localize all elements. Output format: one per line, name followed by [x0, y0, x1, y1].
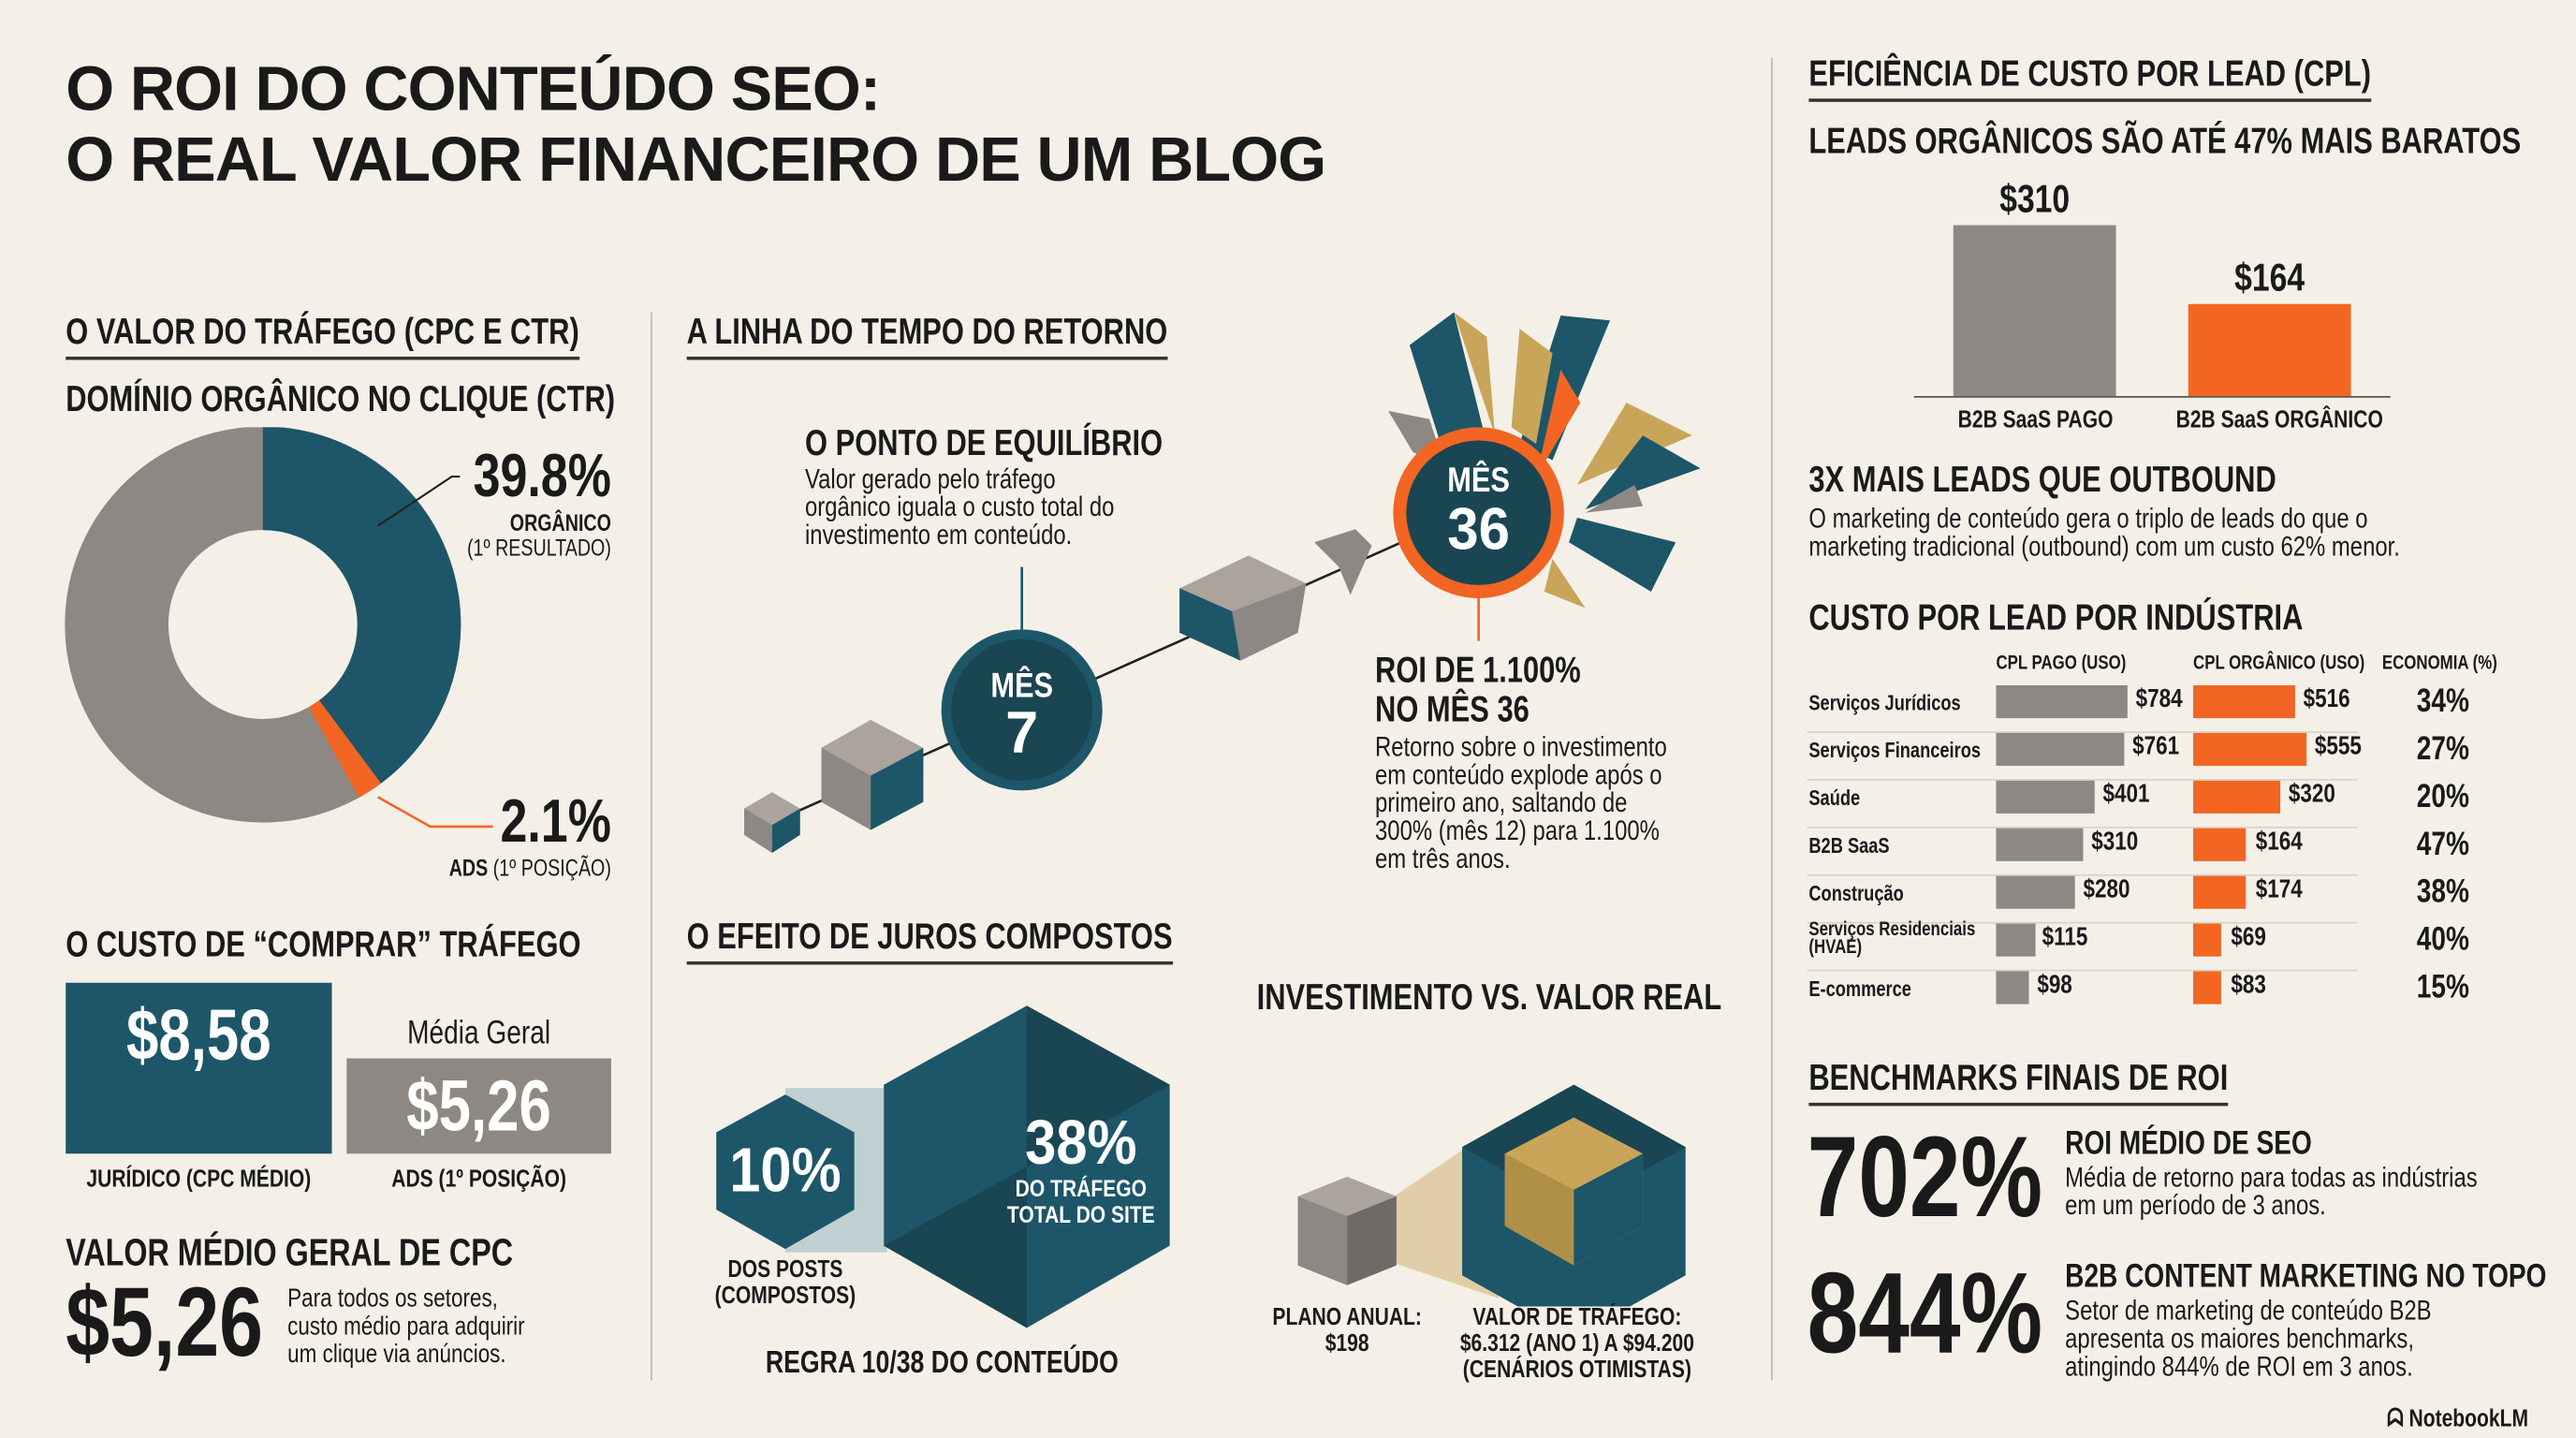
table: cpl industria: (HVAE) — [1808, 935, 1862, 958]
graphic: hexagons 10/38: TOTAL DO SITE — [1007, 1203, 1155, 1228]
table: cpl industria: B2B SaaS — [1808, 833, 1890, 858]
title — [66, 54, 1325, 196]
stat: 2.1%: ADS (1º POSIÇÃO) — [449, 855, 611, 881]
table: cpl industria: 34% — [2417, 683, 2469, 720]
text: cpc description: custo médio para adquirir — [287, 1313, 525, 1341]
graphic: hexagons 10/38: 10% — [729, 1137, 842, 1206]
heading: benchmarks: BENCHMARKS FINAIS DE ROI — [1808, 1057, 2228, 1098]
table: cpl industria: Construção — [1808, 881, 1904, 905]
heading: custo comprar trafego: O CUSTO DE “COMPRAR” TRÁFEGO — [66, 924, 581, 964]
timeline graphic — [744, 313, 1700, 853]
text: roi 1100: primeiro ano, saltando de — [1375, 787, 1627, 818]
text: cpc description — [287, 1285, 525, 1369]
text: cpc description: Para todos os setores, — [287, 1285, 498, 1313]
timeline graphic: 7 — [1005, 700, 1038, 766]
heading: 3x leads: 3X MAIS LEADS QUE OUTBOUND — [1808, 459, 2276, 500]
text: b2b content: Setor de marketing de conteúdo B2B — [2065, 1295, 2432, 1327]
table: cpl industria: Saúde — [1808, 785, 1860, 810]
heading: investimento vs valor: INVESTIMENTO VS. VALOR REAL — [1257, 976, 1721, 1018]
stat: 39.8%: ORGÂNICO — [510, 509, 611, 536]
stat: 39.8% — [467, 442, 611, 561]
chart: cpl bars: $164 — [2234, 257, 2305, 301]
table: cpl industria: CPL ORGÂNICO (USO) — [2193, 651, 2364, 674]
table: cpl industria: $115 — [2042, 924, 2087, 951]
graphic: investimento cubes — [1297, 1084, 1686, 1307]
graphic: hexagons 10/38: DO TRÁFEGO — [1016, 1176, 1147, 1202]
text: outbound: O marketing de conteúdo gera o triplo de leads do que o — [1808, 503, 2368, 535]
table: cpl industria: $401 — [2103, 781, 2150, 809]
stat: 2.1% — [449, 787, 611, 881]
bar: juridico — [66, 983, 332, 1153]
table: cpl industria: Serviços Financeiros — [1808, 738, 1981, 763]
label: valor trafego: VALOR DE TRÁFEGO: — [1472, 1303, 1681, 1331]
text: roi 1100: 300% (mês 12) para 1.100% — [1375, 815, 1660, 846]
table: cpl industria: $164 — [2256, 829, 2303, 857]
chart: cpl bars: B2B SaaS PAGO — [1958, 406, 2113, 433]
text: b2b content: B2B CONTENT MARKETING NO TOPO — [2065, 1259, 2546, 1295]
text: b2b content: atingindo 844% de ROI em 3 anos. — [2065, 1351, 2413, 1382]
caption: regra 10/38: REGRA 10/38 DO CONTEÚDO — [766, 1346, 1119, 1381]
table: cpl industria: ECONOMIA (%) — [2382, 651, 2497, 674]
table: cpl industria: $761 — [2132, 733, 2179, 761]
label: valor trafego: (CENÁRIOS OTIMISTAS) — [1463, 1356, 1691, 1384]
text: ponto de equilibrio: orgânico iguala o custo total do — [805, 492, 1114, 522]
graphic: hexagons 10/38: 38% — [1025, 1108, 1137, 1178]
table: cpl industria: $83 — [2231, 971, 2266, 999]
text: roi medio seo — [2065, 1124, 2478, 1221]
text: roi medio seo: Média de retorno para todas as indústrias — [2065, 1162, 2478, 1193]
title: O ROI DO CONTEÚDO SEO: — [66, 56, 880, 125]
table: cpl industria: $280 — [2083, 876, 2130, 903]
table: cpl industria: $310 — [2091, 829, 2138, 857]
subheading: 47%: LEADS ORGÂNICOS SÃO ATÉ 47% MAIS BARATOS — [1808, 120, 2521, 161]
table: cpl industria: $174 — [2256, 876, 2303, 903]
heading: cpl por industria: CUSTO POR LEAD POR INDÚSTRIA — [1808, 596, 2303, 638]
table: cpl industria: 40% — [2417, 922, 2469, 958]
bar: ads media: $5,26 — [406, 1066, 551, 1147]
stat: 39.8%: (1º RESULTADO) — [467, 535, 611, 561]
text: ponto de equilibrio: O PONTO DE EQUILÍBRIO — [805, 422, 1163, 463]
table: cpl industria: 27% — [2417, 731, 2469, 768]
text: roi medio seo: ROI MÉDIO DE SEO — [2065, 1125, 2312, 1162]
chart: cpl bars: B2B SaaS ORGÂNICO — [2176, 406, 2383, 433]
chart: cpl bars: $310 — [1999, 178, 2070, 222]
bar: juridico: $8,58 — [126, 996, 271, 1077]
label: valor trafego — [1460, 1303, 1694, 1384]
timeline graphic: MÊS — [1447, 460, 1510, 499]
footer: notebooklm: ᗣ NotebookLM — [2387, 1405, 2528, 1433]
label: plano anual: $198 — [1325, 1329, 1369, 1357]
timeline graphic: 36 — [1447, 496, 1510, 562]
title: O REAL VALOR FINANCEIRO DE UM BLOG — [66, 126, 1325, 196]
table: cpl industria: $555 — [2315, 733, 2362, 761]
table: cpl industria: 20% — [2417, 779, 2469, 815]
chart: cpl bars — [1913, 178, 2391, 433]
label: plano anual — [1272, 1303, 1422, 1357]
table: cpl industria: $516 — [2304, 685, 2350, 713]
table: cpl industria: CPL PAGO (USO) — [1996, 651, 2126, 674]
table: cpl industria: $784 — [2136, 685, 2183, 713]
stat: 844%: 844% — [1808, 1249, 2042, 1377]
text: roi medio seo: em um período de 3 anos. — [2065, 1190, 2326, 1221]
bar: ads media — [346, 1058, 611, 1153]
stat: $5,26: $5,26 — [66, 1267, 263, 1377]
text: Média Geral — [407, 1016, 550, 1051]
text: b2b content: apresenta os maiores benchmarks, — [2065, 1323, 2414, 1354]
table: cpl industria: Serviços Residenciais — [1808, 917, 1975, 940]
subheading: ctr: DOMÍNIO ORGÂNICO NO CLIQUE (CTR) — [66, 378, 615, 419]
stat: 702%: 702% — [1808, 1112, 2042, 1240]
table: cpl industria: E-commerce — [1808, 976, 1911, 1001]
text: roi 1100 — [1375, 649, 1667, 874]
text: ponto de equilibrio: investimento em conteúdo. — [805, 520, 1072, 550]
chart: donut — [65, 427, 493, 828]
stat: 2.1%: 2.1% — [500, 787, 611, 855]
label: dos posts: DOS POSTS — [727, 1255, 842, 1284]
label: plano anual: PLANO ANUAL: — [1272, 1303, 1422, 1331]
table: cpl industria: Serviços Jurídicos — [1808, 690, 1961, 715]
label: valor trafego: $6.312 (ANO 1) A $94.200 — [1460, 1329, 1694, 1357]
table: cpl industria: 38% — [2417, 874, 2469, 910]
text: roi 1100: NO MÊS 36 — [1375, 689, 1530, 729]
table: cpl industria: $320 — [2289, 781, 2335, 809]
table: cpl industria: $69 — [2231, 924, 2266, 951]
text: ponto de equilibrio: Valor gerado pelo tráfego — [805, 463, 1056, 494]
table: cpl industria: 47% — [2417, 827, 2469, 863]
heading: eficiencia cpl: EFICIÊNCIA DE CUSTO POR LEAD (CPL) — [1808, 52, 2371, 94]
timeline graphic: MÊS — [990, 665, 1053, 704]
table: cpl industria: $98 — [2037, 971, 2072, 999]
table: cpl industria — [1807, 651, 2497, 1005]
heading: juros compostos: O EFEITO DE JUROS COMPOSTOS — [687, 916, 1173, 957]
text: b2b content — [2065, 1259, 2546, 1382]
stat: 39.8%: 39.8% — [474, 442, 611, 509]
text: roi 1100: em conteúdo explode após o — [1375, 759, 1662, 790]
text: ADS (1º POSIÇÃO) — [391, 1166, 566, 1193]
text: roi 1100: Retorno sobre o investimento — [1375, 731, 1667, 763]
text: roi 1100: ROI DE 1.100% — [1375, 649, 1581, 690]
text: ponto de equilibrio — [805, 422, 1163, 550]
heading: valor medio cpc: VALOR MÉDIO GERAL DE CPC — [66, 1231, 513, 1273]
heading: linha do tempo: A LINHA DO TEMPO DO RETORNO — [687, 311, 1167, 352]
text: roi 1100: em três anos. — [1375, 844, 1511, 874]
label: dos posts: (COMPOSTOS) — [715, 1282, 856, 1310]
table: cpl industria: 15% — [2417, 970, 2469, 1005]
graphic: hexagons 10/38 — [716, 1005, 1170, 1328]
label: dos posts — [715, 1255, 856, 1310]
heading: valor do trafego: O VALOR DO TRÁFEGO (CPC E CTR) — [66, 311, 579, 352]
text: outbound — [1808, 503, 2400, 562]
text: JURÍDICO (CPC MÉDIO) — [86, 1166, 311, 1193]
text: cpc description: um clique via anúncios. — [287, 1341, 506, 1369]
text: outbound: marketing tradicional (outbound) com um custo 62% menor. — [1808, 531, 2400, 562]
